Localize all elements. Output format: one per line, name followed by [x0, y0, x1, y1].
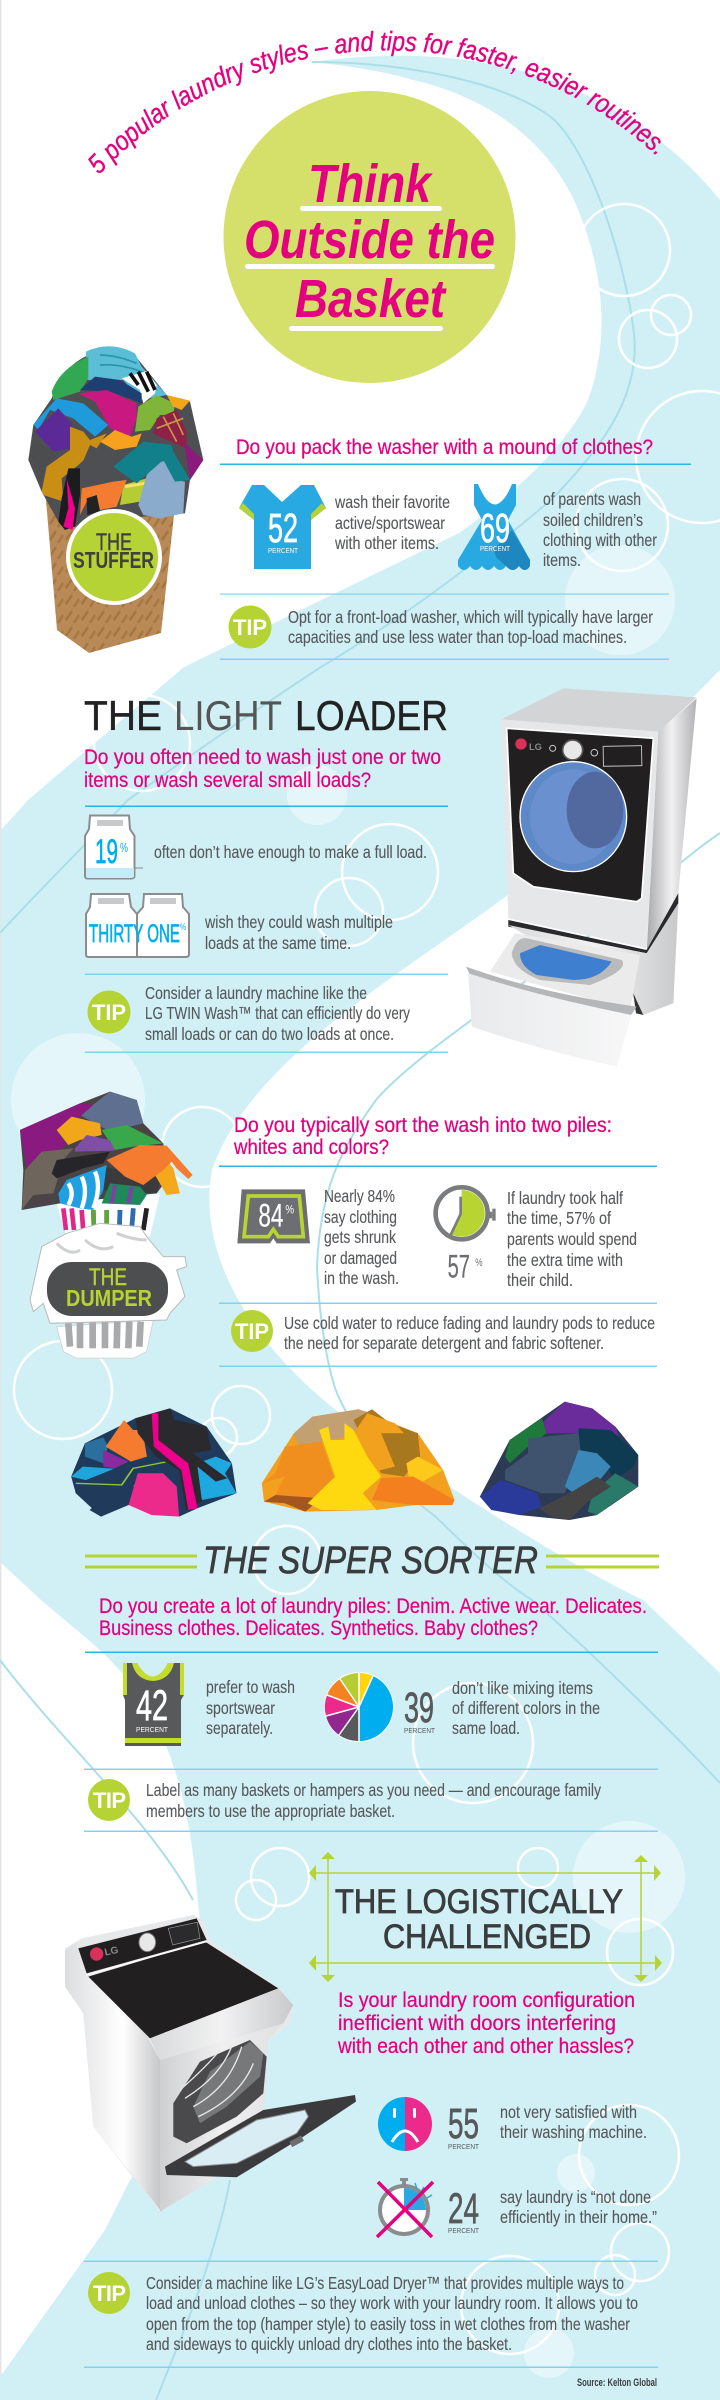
stat: 24 percent: 24 — [448, 2185, 479, 2233]
text: 42 percent — [206, 1677, 295, 1738]
text: 39 percent: same load. — [452, 1718, 520, 1738]
heading: the light loader: LIGHT — [174, 692, 282, 739]
icon: t-shirt 52 percent — [239, 485, 326, 569]
tip: light loader: Consider a laundry machine like the — [145, 983, 367, 1003]
title circle: Think — [308, 154, 434, 214]
icon: tank top 42 percent — [123, 1663, 184, 1746]
text: 39 percent: don’t like mixing items — [452, 1678, 593, 1698]
icon: double bottle thirty one percent: THIRTY ONE — [89, 920, 180, 948]
chart: pie 39 percent — [324, 1672, 394, 1742]
text: 57 percent: their child. — [507, 1270, 573, 1290]
heading frame with arrows: the logistically challenged: THE LOGISTICALLY — [335, 1883, 623, 1921]
question: logistically challenged: with each other and other hassles? — [337, 2035, 634, 2058]
tip: light loader — [88, 983, 410, 1044]
text: 84 percent — [324, 1186, 399, 1288]
icon: stopwatch 57 percent — [436, 1187, 496, 1284]
question: light loader: items or wash several small loads? — [84, 769, 371, 792]
heading: the light loader: THE — [84, 692, 162, 739]
icon: dress 69 percent — [458, 484, 530, 570]
text: 84 percent: say clothing — [324, 1207, 397, 1227]
text: 24 percent — [500, 2187, 657, 2227]
stat: 24 percent — [448, 2185, 479, 2235]
heading frame with arrows: the logistically challenged: CHALLENGED — [383, 1918, 591, 1956]
text: 57 percent: the extra time with — [507, 1250, 623, 1270]
text: 57 percent: the time, 57% of — [507, 1208, 611, 1228]
tip: dumper — [231, 1310, 655, 1353]
text: 52 percent: with other items. — [334, 533, 439, 553]
text: 69 percent: items. — [543, 550, 581, 570]
heading: the light loader: LOADER — [295, 692, 448, 739]
icon: shorts 84 percent — [237, 1189, 310, 1243]
pile: dark clothes — [480, 1402, 638, 1520]
text: 42 percent: separately. — [206, 1718, 273, 1738]
text: 84 percent: Nearly 84% — [324, 1186, 395, 1206]
heading: the super sorter: THE SUPER SORTER — [203, 1540, 538, 1582]
text: 19 percent: often don’t have enough to make a full load. — [154, 842, 427, 862]
tip: super sorter — [88, 1779, 601, 1821]
text: 55 percent — [500, 2102, 647, 2142]
tip: light loader: small loads or can do two loads at once. — [145, 1024, 394, 1044]
text: 57 percent — [507, 1188, 637, 1290]
tip: light loader: TIP — [92, 1000, 126, 1025]
text: 42 percent: prefer to wash — [206, 1677, 295, 1697]
icon: tank top 42 percent: PERCENT — [136, 1725, 168, 1734]
icon: detergent bottle 19 percent — [85, 816, 143, 878]
illustration: the dumper basket — [20, 1092, 193, 1358]
text: 84 percent: gets shrunk — [324, 1227, 396, 1247]
tip: logistically challenged: TIP — [93, 2281, 126, 2306]
stat: 39 percent: 39 — [404, 1684, 434, 1732]
question: dumper — [233, 1114, 612, 1159]
question: light loader: Do you often need to wash just one or two — [84, 746, 441, 769]
question: logistically challenged: inefficient with doors interfering — [338, 2012, 616, 2035]
text: 57 percent: If laundry took half — [507, 1188, 623, 1208]
question: light loader — [84, 746, 441, 792]
tip: stuffer: TIP — [233, 615, 267, 640]
source: Source: Kelton Global — [577, 2377, 657, 2389]
icon: double bottle thirty one percent — [86, 894, 189, 957]
heading: the light loader — [84, 692, 448, 739]
illustration: LG twin wash washer — [466, 688, 697, 1067]
badge: the stuffer — [68, 511, 160, 603]
title circle: Outside the — [244, 210, 495, 270]
icon: detergent bottle 19 percent: % — [120, 840, 128, 855]
question: logistically challenged: Is your laundry room configuration — [338, 1989, 635, 2012]
heading: the super sorter — [85, 1540, 659, 1582]
stat: 55 percent: 55 — [448, 2100, 479, 2148]
text: thirty one percent: loads at the same time. — [205, 933, 351, 953]
illustration: three laundry piles — [71, 1402, 638, 1520]
text: 52 percent: wash their favorite — [334, 492, 450, 512]
text: 69 percent: of parents wash — [543, 489, 641, 509]
badge: the stuffer: STUFFER — [73, 547, 154, 573]
tip: super sorter: members to use the appropriate basket. — [146, 1801, 395, 1821]
text: 52 percent: active/sportswear — [335, 513, 445, 533]
tip: stuffer — [228, 606, 653, 648]
badge: the dumper — [46, 1261, 169, 1317]
clothes pile — [28, 346, 203, 530]
heading frame with arrows: the logistically challenged — [309, 1852, 662, 1982]
badge: the dumper: THE — [89, 1264, 127, 1291]
text: 55 percent: their washing machine. — [500, 2122, 647, 2142]
tip: super sorter: TIP — [93, 1788, 126, 1813]
icon: shorts 84 percent: 84 — [258, 1198, 283, 1234]
question: dumper: whites and colors? — [233, 1136, 389, 1159]
icon: dress 69 percent: 69 — [480, 505, 510, 551]
tip: logistically challenged: and sideways to quickly unload dry clothes into the basket. — [146, 2334, 512, 2354]
badge: the dumper: DUMPER — [66, 1285, 152, 1311]
text: 52 percent — [334, 492, 450, 553]
question: super sorter: Business clothes. Delicates. Synthetics. Baby clothes? — [99, 1617, 538, 1640]
tip: stuffer: capacities and use less water than top-load machines. — [288, 627, 627, 647]
pile: dark and bright clothes — [71, 1408, 236, 1517]
stat: 39 percent: PERCENT — [404, 1726, 435, 1735]
text: 39 percent — [452, 1678, 600, 1738]
icon: stopwatch 57 percent: % — [475, 1257, 483, 1269]
text: 69 percent: clothing with other — [543, 530, 657, 550]
text: 84 percent: or damaged — [324, 1248, 397, 1268]
tip: dumper: TIP — [235, 1319, 269, 1344]
tip: light loader: LG TWIN Wash™ that can efficiently do very — [145, 1003, 410, 1023]
text: 55 percent: not very satisfied with — [500, 2102, 637, 2122]
stat: 55 percent — [448, 2100, 479, 2151]
text: 24 percent: efficiently in their home.” — [500, 2207, 657, 2227]
text: 24 percent: say laundry is “not done — [500, 2187, 651, 2207]
illustration: the stuffer basket — [28, 346, 203, 653]
icon: double bottle thirty one percent: % — [180, 922, 186, 932]
icon: tank top 42 percent: 42 — [136, 1682, 168, 1730]
pile: warm clothes — [262, 1409, 455, 1512]
tip: dumper: the need for separate detergent and fabric softener. — [284, 1333, 604, 1353]
stat: 39 percent — [404, 1684, 435, 1735]
text: 42 percent: sportswear — [206, 1698, 275, 1718]
icon: crossed stopwatch — [377, 2178, 433, 2237]
heading: stuffer question: Do you pack the washer with a mound of clothes? — [236, 436, 653, 459]
icon: t-shirt 52 percent: 52 — [268, 505, 298, 551]
illustration: LG twin wash washer: LG — [529, 742, 542, 752]
icon: detergent bottle 19 percent: 19 — [95, 833, 118, 871]
question: dumper: Do you typically sort the wash into two piles: — [234, 1114, 612, 1137]
question: super sorter — [99, 1595, 647, 1640]
title circle — [224, 91, 516, 383]
icon: dress 69 percent: PERCENT — [480, 544, 510, 553]
question: logistically challenged — [337, 1989, 635, 2058]
icon: stopwatch 57 percent: 57 — [448, 1248, 470, 1284]
title circle: Basket — [295, 269, 447, 329]
icon: shorts 84 percent: % — [285, 1202, 294, 1216]
question: super sorter: Do you create a lot of laundry piles: Denim. Active wear. Delicates. — [99, 1595, 647, 1618]
text: thirty one percent — [204, 912, 393, 953]
badge: the stuffer: THE — [96, 529, 132, 556]
illustration: LG easyload dryer: LG — [104, 1945, 120, 1959]
stat: 55 percent: PERCENT — [448, 2142, 479, 2151]
subtitle on arc: 5 popular laundry styles – and tips for faster, easier routines. — [88, 30, 661, 173]
text: 84 percent: in the wash. — [324, 1268, 399, 1288]
text: 69 percent: soiled children’s — [543, 510, 643, 530]
illustration: LG easyload dryer — [65, 1915, 356, 2212]
text: thirty one percent: wish they could wash multiple — [204, 912, 393, 932]
clothes pile and basket — [20, 1092, 193, 1358]
icon: t-shirt 52 percent: PERCENT — [268, 546, 298, 555]
text: 39 percent: of different colors in the — [452, 1698, 600, 1718]
tip: logistically challenged — [88, 2272, 638, 2354]
text: 69 percent — [543, 489, 657, 570]
stat: 24 percent: PERCENT — [448, 2226, 479, 2235]
text: 57 percent: parents would spend — [507, 1229, 637, 1249]
icon: sad face — [378, 2097, 432, 2151]
tip: super sorter: Label as many baskets or hampers as you need — and encourage family — [146, 1780, 601, 1800]
